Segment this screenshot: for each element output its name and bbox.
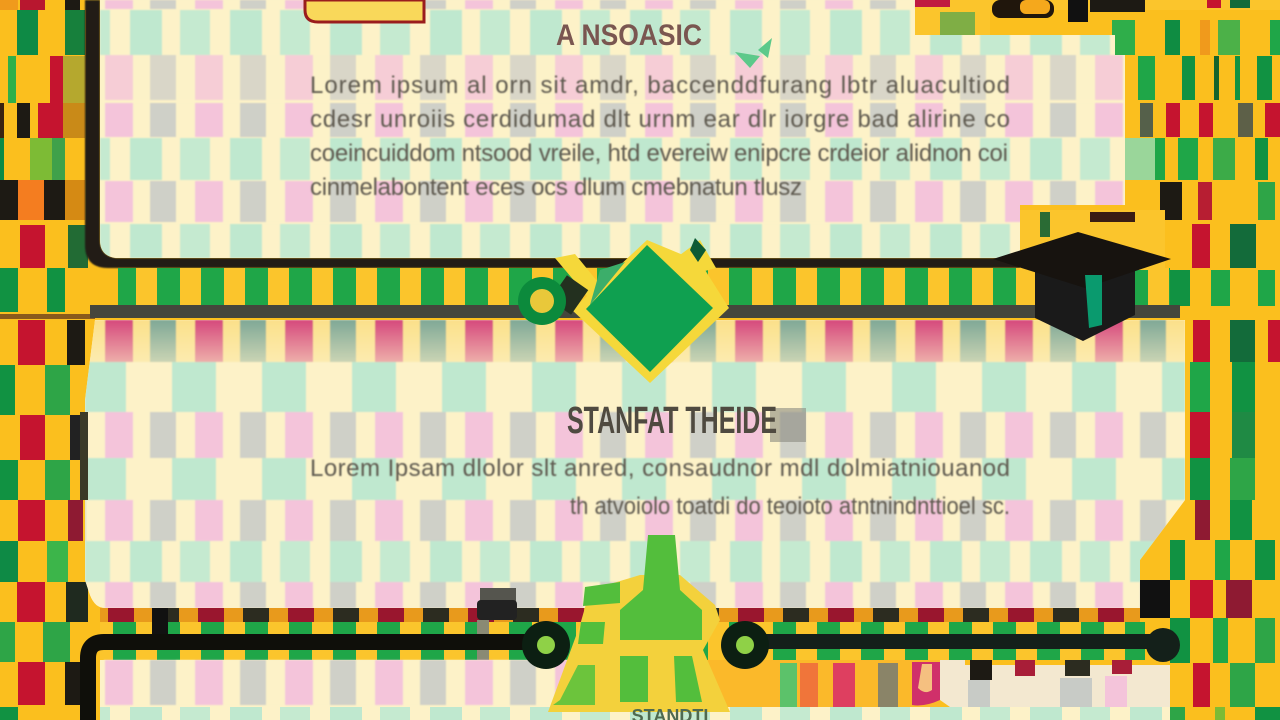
background: right kente column [1110,0,1280,720]
text block: top card paragraph: cinmelabontent eces ocs dlum cmebnatun tlusz [310,174,802,201]
background: left kente column [0,0,95,720]
icon: small green leaves [735,38,772,68]
icon: ring node on middle band [518,275,588,325]
panel: bottom card, partly visible [100,660,1170,720]
text block: top card paragraph [310,72,1010,201]
heading: top card: A NSOASIC [556,19,702,52]
ornament: yellow badge at top of card [305,0,424,22]
icon: rail end cap [1146,628,1180,662]
text block: top card paragraph: Lorem ipsum al orn sit amdr, baccenddfurang lbtr aluacultiod [310,72,1010,99]
text block: top card paragraph: coeincuiddom ntsood vreile, htd evereiw enipcre crdeior alidnon coi [310,140,1008,167]
panel: top text card [85,0,1130,268]
text block: middle card paragraph: th atvoiolo toatdi do teoioto atntnindnttioel sc. [570,493,1010,520]
band: lower strip with dark row [100,588,1145,665]
text block: top card paragraph: cdesr unroiis cerdidumad dlt urnm ear dlr iorgre bad alirine co [310,106,1010,133]
connector: black rail with corner [88,634,1165,720]
band: middle strip [90,268,1180,318]
text block: middle card paragraph: Lorem Ipsam dlolor slt anred, consaudnor mdl dolmiatniouanod [310,455,1010,482]
icon: left rail node [522,621,570,669]
icon: green diamond with yellow frame [555,238,729,383]
top strip: checks and ornaments [85,0,1280,35]
text block: middle card paragraph [310,455,1010,520]
heading: middle card: STANFAT THEIDE [567,400,777,442]
icon: right rail node [721,621,769,669]
icon: yellow and green building [548,535,730,712]
icon: graduation cap [993,210,1171,341]
panel: middle text card [80,320,1185,608]
